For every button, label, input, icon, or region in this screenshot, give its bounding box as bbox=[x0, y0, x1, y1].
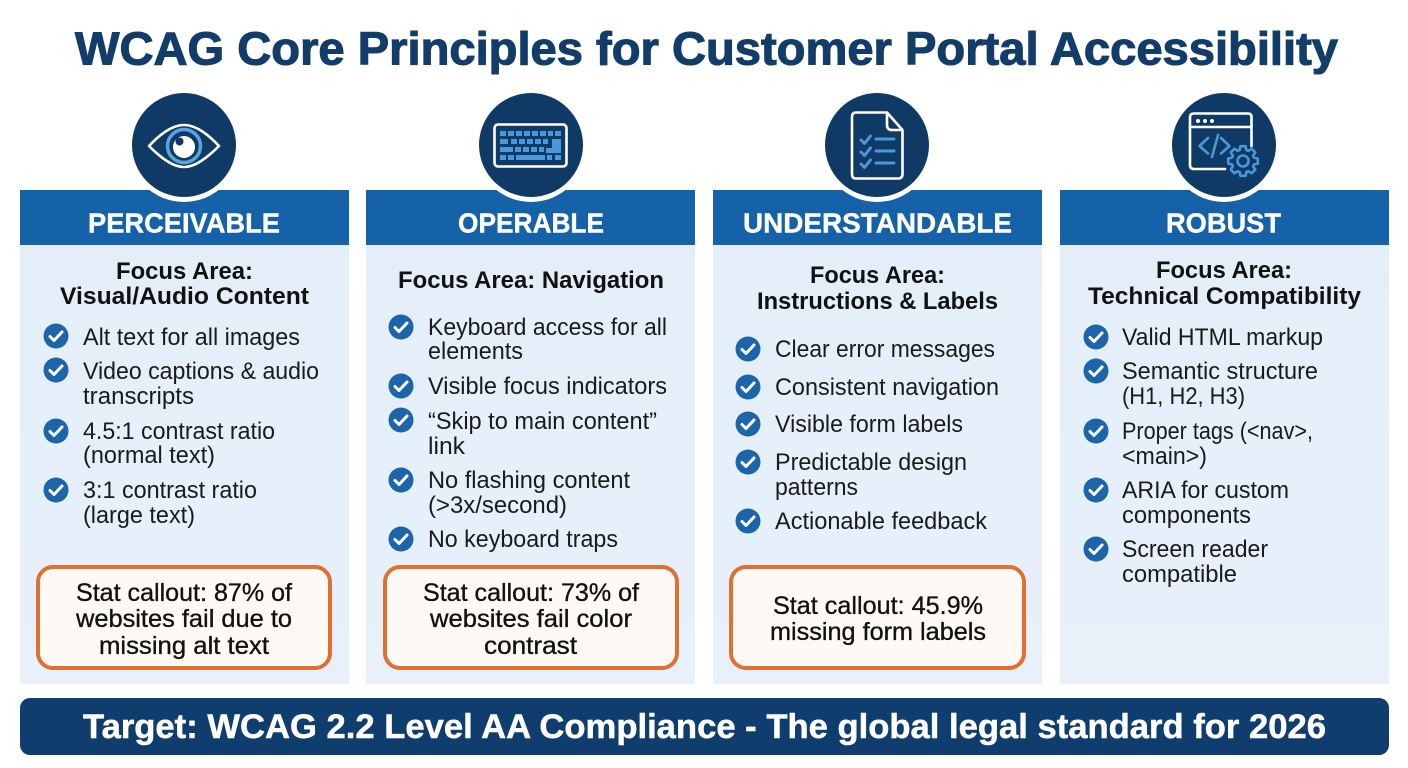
checklist: robust: <main>) bbox=[1122, 443, 1207, 470]
focus area: operable: Focus Area: Navigation bbox=[398, 267, 664, 294]
checklist: robust: (H1, H2, H3) bbox=[1122, 383, 1245, 410]
checklist: robust: compatible bbox=[1122, 561, 1237, 588]
checklist: perceivable: Video captions & audio bbox=[83, 358, 319, 385]
callout: perceivable: missing alt text bbox=[99, 632, 269, 660]
title: WCAG Core Principles for Customer Portal Accessibility bbox=[75, 22, 1338, 74]
heading: robust: ROBUST bbox=[1166, 208, 1281, 238]
callout: perceivable: websites fail due to bbox=[75, 605, 292, 633]
focus area: robust: Technical Compatibility bbox=[1088, 283, 1362, 310]
heading: operable: OPERABLE bbox=[458, 208, 604, 238]
checklist: operable: No flashing content bbox=[428, 467, 630, 494]
focus area: perceivable bbox=[60, 258, 309, 310]
checklist: robust: Screen reader bbox=[1122, 536, 1268, 563]
checklist: understandable: Actionable feedback bbox=[775, 508, 988, 535]
panel: understandable bbox=[713, 190, 1042, 684]
checklist: robust: Proper tags (<nav>, bbox=[1122, 418, 1313, 445]
checklist: understandable: patterns bbox=[775, 474, 858, 501]
checklist: robust bbox=[1084, 324, 1323, 588]
checklist: perceivable: 3:1 contrast ratio bbox=[83, 477, 257, 504]
callout: operable: websites fail color bbox=[429, 605, 632, 633]
checklist: understandable bbox=[736, 336, 999, 535]
header: understandable bbox=[713, 190, 1042, 245]
header: perceivable bbox=[20, 190, 349, 245]
focus area: understandable: Focus Area: bbox=[810, 262, 945, 289]
checklist: robust: ARIA for custom bbox=[1122, 477, 1289, 504]
checklist: understandable: Clear error messages bbox=[775, 336, 995, 363]
checklist: robust: components bbox=[1122, 502, 1251, 529]
checklist: operable: elements bbox=[428, 338, 523, 365]
checklist: perceivable: Alt text for all images bbox=[83, 324, 300, 351]
callout: understandable: Stat callout: 45.9% bbox=[773, 592, 983, 620]
checklist: understandable: Predictable design bbox=[775, 449, 967, 476]
callout: operable: contrast bbox=[484, 632, 577, 660]
callout: operable bbox=[385, 567, 677, 668]
checklist: operable: (>3x/second) bbox=[428, 492, 567, 519]
checklist: operable: link bbox=[428, 433, 466, 460]
icon: keyboard bbox=[475, 90, 587, 202]
checklist: perceivable: (large text) bbox=[83, 502, 195, 529]
header: operable bbox=[366, 190, 695, 245]
focus area: robust: Focus Area: bbox=[1156, 257, 1292, 284]
heading: perceivable: PERCEIVABLE bbox=[88, 208, 280, 238]
checklist: operable: “Skip to main content” bbox=[428, 408, 657, 435]
callout: understandable: missing form labels bbox=[770, 618, 986, 646]
checklist: understandable: Consistent navigation bbox=[775, 374, 999, 401]
callout: operable: Stat callout: 73% of bbox=[423, 579, 639, 607]
header: robust bbox=[1060, 190, 1389, 245]
checklist: operable: No keyboard traps bbox=[428, 526, 618, 553]
heading: understandable: UNDERSTANDABLE bbox=[743, 208, 1012, 238]
panel: robust bbox=[1060, 190, 1389, 684]
footer banner: Target: WCAG 2.2 Level AA Compliance - The global legal standard for 2026 bbox=[83, 708, 1326, 746]
focus area: robust bbox=[1088, 257, 1362, 310]
checklist: operable: Visible focus indicators bbox=[428, 373, 667, 400]
callout: perceivable bbox=[38, 567, 330, 668]
checklist: robust: Valid HTML markup bbox=[1122, 324, 1323, 351]
icon: eye bbox=[128, 90, 240, 202]
checklist: understandable: Visible form labels bbox=[775, 411, 963, 438]
checklist: perceivable: 4.5:1 contrast ratio bbox=[83, 418, 275, 445]
focus area: understandable: Instructions & Labels bbox=[757, 288, 998, 315]
panel: perceivable bbox=[20, 190, 349, 684]
checklist: perceivable: transcripts bbox=[83, 383, 194, 410]
callout: perceivable: Stat callout: 87% of bbox=[76, 579, 292, 607]
icon: checklist document bbox=[821, 90, 933, 202]
checklist: operable bbox=[388, 314, 667, 553]
checklist: robust: Semantic structure bbox=[1122, 358, 1318, 385]
icon: code window with gear bbox=[1168, 90, 1280, 202]
focus area: perceivable: Focus Area: bbox=[116, 258, 253, 285]
focus area: perceivable: Visual/Audio Content bbox=[60, 283, 309, 310]
checklist: perceivable bbox=[44, 324, 319, 529]
focus area: understandable bbox=[757, 262, 998, 315]
checklist: perceivable: (normal text) bbox=[83, 442, 215, 469]
callout: understandable bbox=[731, 567, 1024, 668]
footer banner bbox=[20, 698, 1389, 755]
checklist: operable: Keyboard access for all bbox=[428, 314, 667, 341]
panel: operable bbox=[366, 190, 695, 684]
